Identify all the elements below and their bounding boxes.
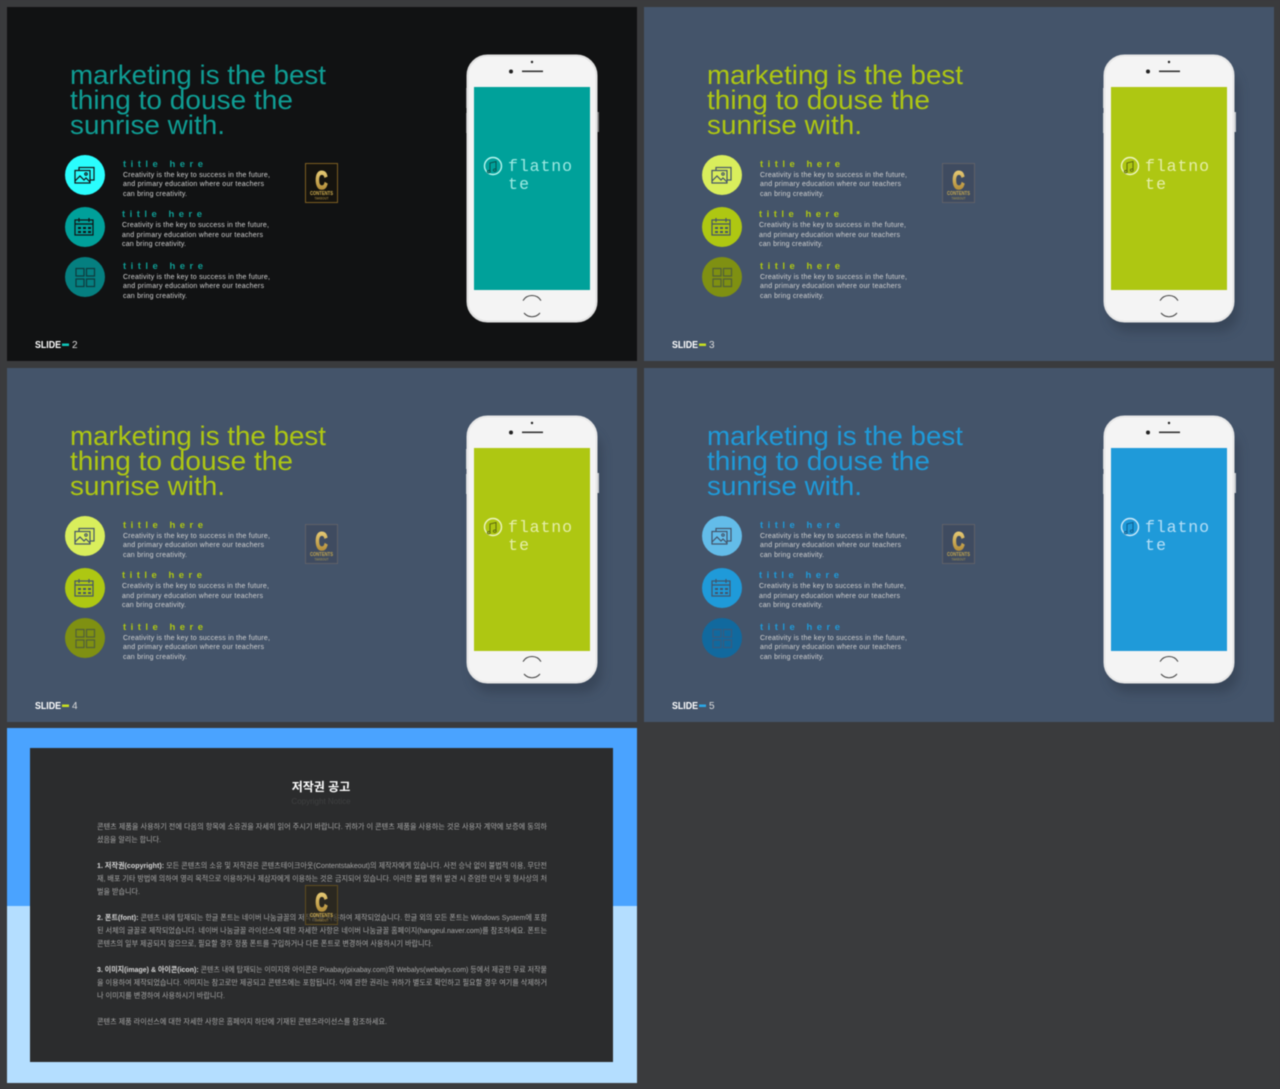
- copyright clause: [97, 860, 547, 896]
- panel: slide 5 slate blue: [644, 368, 1274, 722]
- icon: grid: [702, 618, 742, 658]
- heading: [707, 60, 964, 140]
- item 3 text: Creativity is the key to success in the future,: [123, 635, 270, 642]
- logo: CONTENTS: [947, 191, 970, 197]
- item 3 text: can bring creativity.: [123, 293, 187, 300]
- app logo: te: [508, 175, 529, 194]
- font clause: 2. 폰트(font): 콘텐츠 내에 탑재되는 한글 폰트는 네이버 나눔글꼴의 저작물을 사용하여 제작되었습니다. 한글 외의 모든 폰트는 Windows System에 포함: [97, 912, 547, 922]
- logo: CONTENTS: [947, 552, 970, 558]
- item 1 text: can bring creativity.: [760, 552, 824, 559]
- phone: [466, 56, 599, 322]
- item 1 text: Creativity is the key to success in the future,: [760, 533, 907, 540]
- logo: TAKEOUT: [314, 196, 329, 200]
- icon: image: [65, 516, 105, 556]
- item 3 text: can bring creativity.: [760, 654, 824, 661]
- slide number: [35, 340, 78, 351]
- heading: marketing is the best: [70, 60, 327, 90]
- item 1 text: title here: [760, 159, 840, 170]
- item 2 text: [122, 570, 269, 609]
- item 2 text: Creativity is the key to success in the future,: [122, 583, 269, 590]
- icon: calendar: [65, 207, 105, 247]
- icon: grid: [702, 257, 742, 297]
- app logo: [1122, 518, 1209, 555]
- logo watermark: [306, 886, 338, 924]
- item 1 text: [760, 520, 907, 559]
- slide number: 2: [72, 340, 78, 351]
- heading: marketing is the best: [707, 60, 964, 90]
- item 1 text: and primary education where our teachers: [123, 181, 264, 188]
- item 2 text: and primary education where our teachers: [122, 593, 264, 600]
- app logo: flatno: [508, 518, 572, 537]
- app logo: flatno: [508, 157, 572, 176]
- item 2 text: and primary education where our teachers: [759, 232, 900, 239]
- slide number: [672, 701, 715, 712]
- item 3 text: can bring creativity.: [760, 293, 824, 300]
- item 3 text: and primary education where our teachers: [760, 644, 902, 651]
- item 2 text: title here: [759, 209, 839, 220]
- app logo: [1122, 157, 1209, 194]
- logo watermark: TAKEOUT: [314, 918, 329, 922]
- icon: image: [702, 516, 742, 556]
- notice subtitle: Copyright Notice: [291, 797, 351, 806]
- item 1 text: can bring creativity.: [123, 552, 187, 559]
- item 1 text: title here: [123, 520, 203, 531]
- item 1 text: title here: [760, 520, 840, 531]
- heading: sunrise with.: [70, 471, 225, 501]
- notice title: 저작권 공고: [292, 779, 350, 794]
- slide number: [672, 340, 715, 351]
- icon: grid: [65, 618, 105, 658]
- phone: [1103, 56, 1239, 332]
- item 1 text: [123, 520, 270, 559]
- item 3 text: can bring creativity.: [123, 654, 187, 661]
- panel: slide 2 black teal: [7, 7, 637, 361]
- item 1 text: and primary education where our teachers: [123, 542, 264, 549]
- logo: TAKEOUT: [952, 558, 966, 562]
- item 3 text: and primary education where our teachers: [123, 283, 264, 290]
- logo: C: [316, 528, 328, 556]
- heading: sunrise with.: [707, 110, 862, 140]
- item 2 text: title here: [122, 209, 202, 220]
- intro paragraph: 콘텐츠 제품을 사용하기 전에 다음의 항목에 소유권을 자세히 읽어 주시기 바랍니다. 귀하가 이 콘텐츠 제품을 사용하는 것은 사용자 계약에 보증에 동의하: [97, 821, 547, 831]
- logo: TAKEOUT: [314, 558, 329, 562]
- icon: image: [65, 155, 105, 195]
- font clause: 된 서체의 글꼴로 제작되었습니다. 네이버 나눔글꼴 라이선스에 대한 자세한 사항은 네이버 나눔글꼴 홈페이지(hangeul.naver.com)를 참조하세요. 폰트는: [97, 925, 547, 935]
- item 2 text: can bring creativity.: [759, 602, 823, 609]
- slide number: [35, 701, 78, 712]
- item 1 text: [760, 159, 907, 198]
- logo: C: [316, 167, 328, 195]
- heading: marketing is the best: [70, 421, 327, 451]
- phone: [1103, 416, 1239, 693]
- item 2 text: [759, 209, 906, 248]
- heading: thing to douse the: [707, 446, 930, 476]
- item 3 text: [760, 622, 907, 661]
- item 1 text: Creativity is the key to success in the future,: [123, 172, 270, 179]
- font clause: [97, 912, 547, 948]
- item 2 text: title here: [122, 570, 202, 581]
- logo watermark: C: [316, 889, 328, 917]
- app logo: [484, 518, 572, 555]
- copyright clause: 벌을 받습니다.: [97, 886, 140, 896]
- item 3 text: and primary education where our teachers: [123, 644, 264, 651]
- image and icon clause: 3. 이미지(image) & 아이콘(icon): 콘텐츠 내에 탑재되는 이미지와 아이콘은 Pixabay(pixabay.com)와 Webalys(webalys.com) 등에서 제공한 무료 저작물: [97, 964, 547, 974]
- panel: copyright notice: [7, 728, 637, 1083]
- phone: [466, 416, 602, 693]
- logo: C: [952, 528, 964, 556]
- item 1 text: Creativity is the key to success in the future,: [760, 172, 907, 179]
- app logo: te: [1145, 175, 1166, 194]
- item 2 text: Creativity is the key to success in the future,: [759, 222, 906, 229]
- heading: thing to douse the: [707, 85, 930, 115]
- copyright clause: 1. 저작권(copyright): 모든 콘텐츠의 소유 및 저작권은 콘텐츠테이크아웃(Contentstakeout)의 제작자에게 있습니다. 사전 승낙 없이 불법적 이용, 무단전: [97, 860, 547, 870]
- item 2 text: title here: [759, 570, 839, 581]
- panel: slide 3 slate lime: [644, 7, 1274, 361]
- font clause: 콘텐츠의 일부 제공되지 않으므로, 필요할 경우 정품 폰트를 구입하거나 다른 폰트로 변경하여 사용하시기 바랍니다.: [97, 938, 433, 948]
- item 2 text: can bring creativity.: [122, 241, 186, 248]
- heading: [707, 421, 964, 501]
- app logo: flatno: [1145, 518, 1209, 537]
- icon: grid: [65, 257, 105, 297]
- app logo: [484, 157, 572, 194]
- item 2 text: can bring creativity.: [759, 241, 823, 248]
- slide number: SLIDE: [672, 340, 698, 351]
- item 3 text: [123, 622, 270, 661]
- app logo: flatno: [1145, 157, 1209, 176]
- slide number: SLIDE: [672, 701, 698, 712]
- logo: CONTENTS: [310, 552, 333, 558]
- heading: thing to douse the: [70, 85, 293, 115]
- item 2 text: [122, 209, 269, 248]
- icon: image: [702, 155, 742, 195]
- app logo: te: [508, 536, 529, 555]
- slide number: SLIDE: [35, 701, 61, 712]
- item 3 text: title here: [760, 261, 840, 272]
- item 3 text: Creativity is the key to success in the future,: [123, 274, 270, 281]
- license note: 콘텐츠 제품 라이선스에 대한 자세한 사항은 홈페이지 하단에 기재된 콘텐츠라이선스를 참조하세요.: [97, 1016, 387, 1026]
- item 2 text: and primary education where our teachers: [122, 232, 264, 239]
- logo: C: [952, 167, 964, 195]
- item 1 text: title here: [123, 159, 203, 170]
- item 1 text: and primary education where our teachers: [760, 181, 902, 188]
- item 2 text: Creativity is the key to success in the future,: [122, 222, 269, 229]
- item 1 text: Creativity is the key to success in the future,: [123, 533, 270, 540]
- item 1 text: and primary education where our teachers: [760, 542, 902, 549]
- item 3 text: [123, 261, 270, 300]
- heading: sunrise with.: [707, 471, 862, 501]
- panel: slide 4 slate lime: [7, 368, 637, 722]
- logo: [306, 164, 338, 202]
- item 2 text: [759, 570, 906, 609]
- item 3 text: [760, 261, 907, 300]
- image and icon clause: 나 이미지를 변경하여 사용하시기 바랍니다.: [97, 990, 225, 1000]
- copyright clause: 재, 배포 기타 방법에 의하여 영리 목적으로 이용하거나 제삼자에게 이용하는 것은 금지되어 있습니다. 이러한 불법 행위 발견 시 준엄한 민사 및 형사상의 처: [97, 873, 547, 883]
- slide number: 4: [72, 701, 78, 712]
- logo: [942, 164, 974, 202]
- icon: calendar: [702, 207, 742, 247]
- item 1 text: can bring creativity.: [760, 191, 824, 198]
- logo: [306, 524, 338, 564]
- heading: [70, 421, 327, 501]
- heading: marketing is the best: [707, 421, 964, 451]
- heading: sunrise with.: [70, 110, 225, 140]
- heading: thing to douse the: [70, 446, 293, 476]
- intro paragraph: 셨음을 알리는 합니다.: [97, 834, 161, 844]
- item 1 text: [123, 159, 270, 198]
- app logo: te: [1145, 536, 1166, 555]
- logo: TAKEOUT: [952, 196, 966, 200]
- intro paragraph: [97, 821, 547, 844]
- logo: [942, 524, 974, 564]
- logo: CONTENTS: [310, 191, 333, 197]
- item 1 text: can bring creativity.: [123, 191, 187, 198]
- item 3 text: Creativity is the key to success in the future,: [760, 274, 907, 281]
- logo watermark: CONTENTS: [310, 913, 333, 919]
- item 3 text: title here: [760, 622, 840, 633]
- slide number: 5: [709, 701, 715, 712]
- heading: [70, 60, 327, 140]
- item 3 text: title here: [123, 622, 203, 633]
- item 2 text: can bring creativity.: [122, 602, 186, 609]
- item 3 text: title here: [123, 261, 203, 272]
- item 3 text: and primary education where our teachers: [760, 283, 902, 290]
- slide number: SLIDE: [35, 340, 61, 351]
- item 2 text: Creativity is the key to success in the future,: [759, 583, 906, 590]
- image and icon clause: [97, 964, 547, 1000]
- icon: calendar: [702, 568, 742, 608]
- item 2 text: and primary education where our teachers: [759, 593, 900, 600]
- item 3 text: Creativity is the key to success in the future,: [760, 635, 907, 642]
- slide number: 3: [709, 340, 715, 351]
- image and icon clause: 을 이용하여 제작되었습니다. 이미지는 참고로만 제공되고 콘텐츠에는 포함됩니다. 이에 관한 권리는 귀하가 별도로 확인하고 필요할 경우 여기를 삭제하거: [97, 977, 547, 987]
- icon: calendar: [65, 568, 105, 608]
